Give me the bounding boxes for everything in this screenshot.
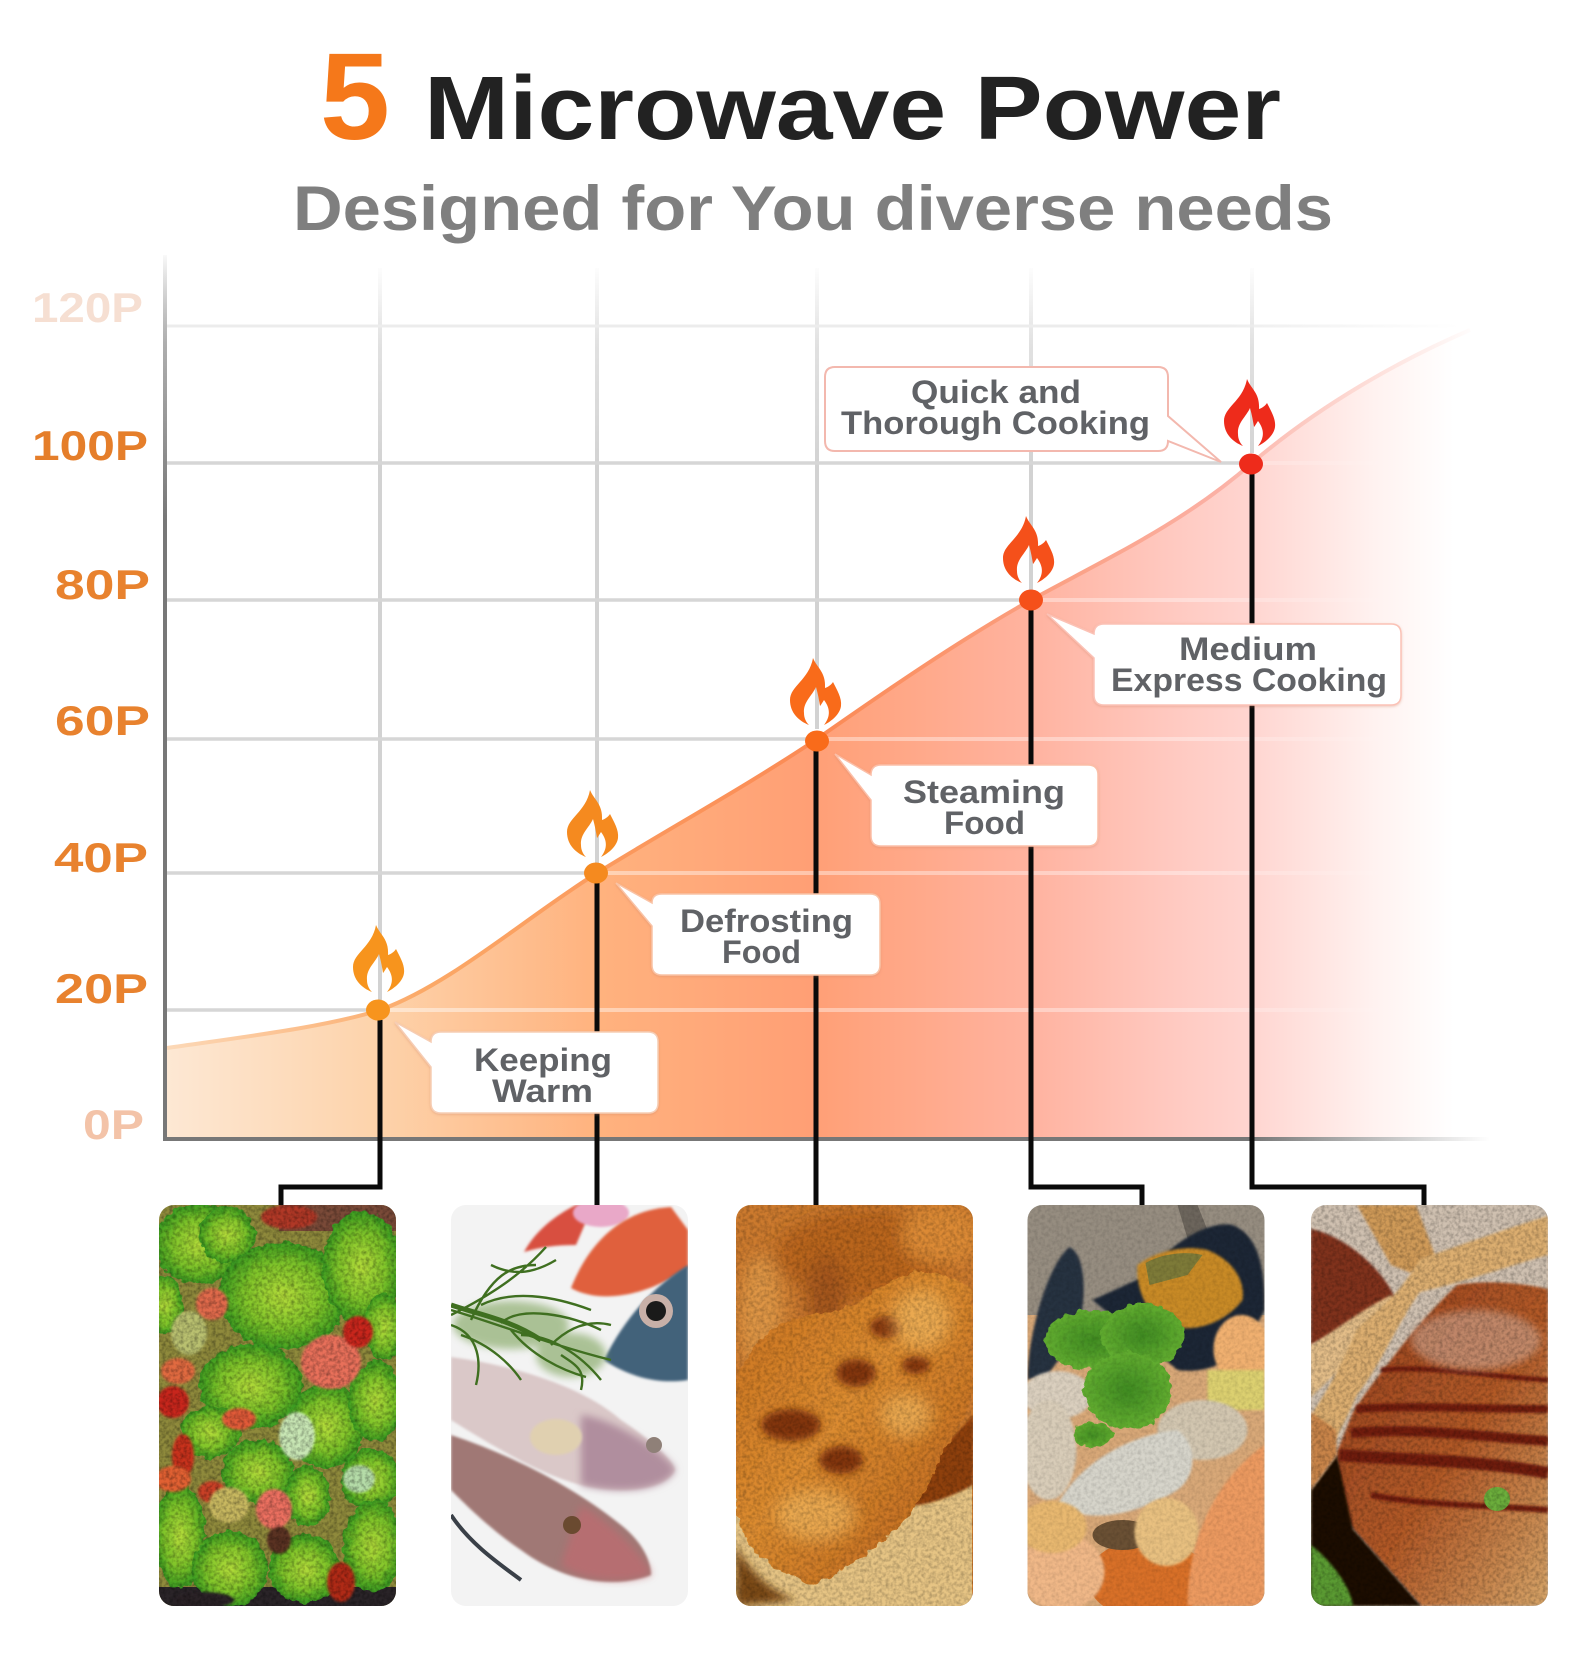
axes bbox=[163, 255, 1490, 1139]
callout: Defrosting Food bbox=[616, 883, 880, 975]
photo: seafood with mussels bbox=[1018, 1205, 1270, 1619]
callout: Keeping Warm: Warm bbox=[492, 1073, 593, 1109]
area chart: power curve bbox=[167, 330, 1470, 1137]
chart grid bbox=[167, 268, 1460, 1010]
y axis labels: 40P bbox=[54, 834, 148, 881]
photo: fresh fish on ice bbox=[451, 1199, 688, 1606]
callout: Steaming Food bbox=[835, 754, 1098, 846]
callout: Quick and Thorough Cooking: Thorough Cooking bbox=[841, 405, 1150, 441]
y axis labels: 20P bbox=[55, 965, 148, 1012]
callout: Steaming Food: Food bbox=[944, 805, 1025, 841]
title: 5 bbox=[320, 29, 390, 166]
callout: Medium Express Cooking: Medium bbox=[1179, 631, 1317, 667]
photo: broccoli and vegetables bbox=[147, 1204, 404, 1608]
photo: grilled lamb chops bbox=[1311, 1205, 1548, 1606]
y axis labels: 60P bbox=[55, 697, 150, 744]
callout: Defrosting Food: Defrosting bbox=[680, 903, 853, 939]
marker: 100P flame and dot bbox=[1224, 379, 1275, 474]
marker: 20P flame and dot bbox=[353, 925, 404, 1020]
y axis labels: 100P bbox=[32, 422, 148, 469]
callout: Medium Express Cooking: Express Cooking bbox=[1111, 662, 1387, 698]
subtitle: Designed for You diverse needs bbox=[293, 174, 1333, 244]
y axis labels: 80P bbox=[55, 561, 150, 608]
callout: Keeping Warm bbox=[395, 1022, 658, 1113]
marker: 60P flame and dot bbox=[790, 658, 841, 752]
y axis labels: 0P bbox=[83, 1101, 144, 1148]
title bbox=[320, 29, 1281, 166]
marker: 80P flame and dot bbox=[1003, 516, 1054, 610]
callout: Quick and Thorough Cooking: Quick and bbox=[911, 374, 1081, 410]
callout: Keeping Warm: Keeping bbox=[474, 1042, 612, 1078]
callout: Steaming Food: Steaming bbox=[903, 774, 1065, 810]
y axis labels: 120P bbox=[32, 284, 143, 331]
marker: 40P flame and dot bbox=[567, 790, 618, 884]
callout: Medium Express Cooking bbox=[1047, 614, 1401, 705]
connector lines to food photos bbox=[281, 472, 1424, 1206]
callout: Quick and Thorough Cooking bbox=[825, 367, 1221, 462]
title: Microwave Power bbox=[424, 59, 1281, 159]
callout: Defrosting Food: Food bbox=[722, 934, 801, 970]
photo: fried chicken bbox=[736, 1205, 981, 1606]
y axis labels bbox=[32, 284, 150, 1148]
